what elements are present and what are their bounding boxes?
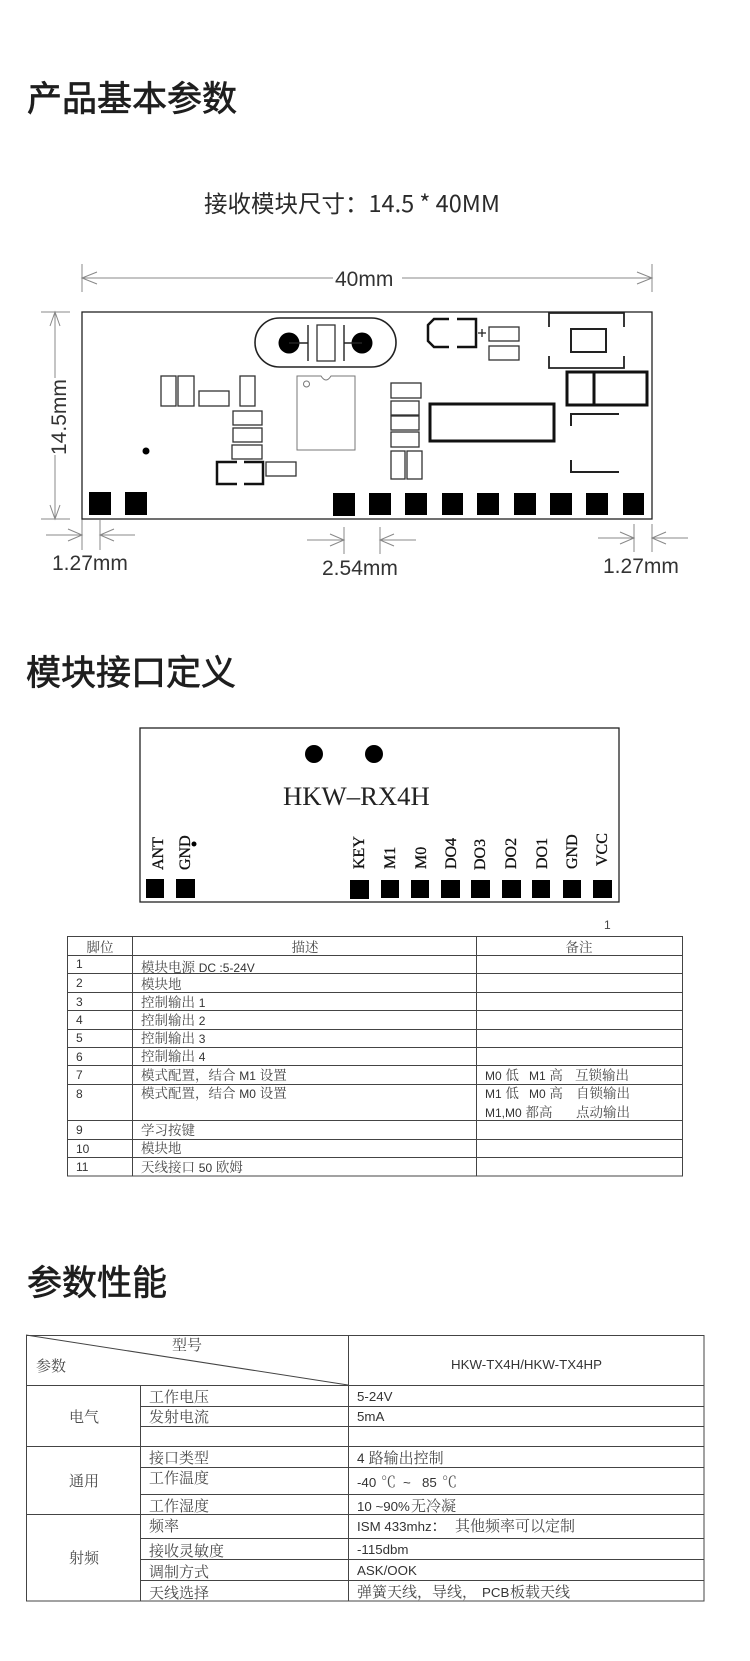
dimension: 40mm width: 40mm — [335, 268, 393, 291]
parameter values: 10 ~90% — [357, 1499, 410, 1514]
pin descriptions: 模式配置，结合 M0 设置 — [141, 1085, 287, 1102]
dimension: 14.5mm height: 14.5mm — [48, 379, 71, 455]
pin numbers: 2 — [76, 976, 83, 990]
parameter values — [357, 1389, 575, 1601]
table: performance parameters — [26, 1335, 704, 1602]
pin numbers: 4 — [76, 1013, 83, 1027]
pin descriptions: 天线接口 50 欧姆 — [141, 1159, 243, 1175]
push button — [549, 313, 624, 368]
pin labels: DO1 — [534, 838, 551, 869]
pin numbers: 6 — [76, 1050, 83, 1064]
dimension: 2.54mm pitch: 2.54mm — [322, 557, 398, 580]
table header labels: HKW-TX4H/HKW-TX4HP — [451, 1357, 602, 1372]
page number: 1 — [604, 918, 611, 932]
small components: left cluster — [142, 376, 296, 476]
pin descriptions: 控制输出 4 — [141, 1048, 206, 1064]
mode notes: 自锁输出 — [576, 1085, 630, 1101]
capacitor bracket: lower left — [217, 462, 263, 484]
parameter names: 工作温度 — [149, 1469, 209, 1487]
parameter names: 工作电压 — [149, 1388, 209, 1406]
parameter values: ASK/OOK — [357, 1563, 417, 1578]
dimension diagram: PCB layout — [41, 264, 688, 580]
corner marks — [571, 414, 619, 472]
table grid — [67, 936, 682, 1176]
pin descriptions: 控制输出 3 — [141, 1030, 206, 1046]
parameter values: ℃ — [381, 1474, 396, 1491]
table header labels: 参数 — [36, 1358, 66, 1375]
parameter values: 4 路输出控制 — [357, 1450, 444, 1467]
dimension: right 1.27mm: 1.27mm — [603, 555, 679, 578]
solder pads — [89, 492, 644, 516]
parameter names — [149, 1388, 224, 1602]
jumper block — [567, 372, 647, 405]
pin labels: ANT — [150, 837, 167, 870]
pin descriptions: 模式配置，结合 M1 设置 — [141, 1067, 287, 1084]
category labels: 电气 — [69, 1408, 99, 1426]
mode notes: M1,M0 都高 — [485, 1104, 552, 1120]
dimension: left 1.27mm: 1.27mm — [52, 552, 128, 575]
parameter values: ℃ — [442, 1474, 457, 1491]
parameter names: 发射电流 — [149, 1408, 209, 1426]
pin descriptions: 模块地 — [141, 1140, 182, 1156]
table grid — [26, 1335, 704, 1601]
pin numbers: 9 — [76, 1123, 83, 1137]
pin descriptions: 模块电源 DC :5-24V — [141, 959, 255, 975]
pin numbers: 5 — [76, 1031, 83, 1045]
parameter names: 工作湿度 — [149, 1497, 209, 1515]
pin labels: VCC — [594, 833, 611, 866]
pin labels: DO2 — [503, 838, 520, 869]
capacitor bracket: top with plus mark — [428, 319, 486, 347]
pin numbers — [76, 957, 90, 1174]
parameter values: ISM 433mhz： — [357, 1519, 445, 1534]
parameter values: 85 — [422, 1475, 437, 1490]
chip footprint — [297, 376, 355, 450]
parameter values: -115dbm — [357, 1542, 408, 1557]
table header: 描述 — [292, 939, 319, 955]
parameter values: 5-24V — [357, 1389, 393, 1404]
large relay block — [430, 404, 554, 441]
pin numbers: 8 — [76, 1087, 83, 1101]
pin labels: KEY — [351, 836, 368, 869]
parameter values: PCB — [482, 1585, 509, 1600]
table: pin definitions — [67, 936, 682, 1176]
pin numbers: 10 — [76, 1142, 90, 1156]
dimension: 14.5mm height — [41, 312, 71, 519]
mode notes — [485, 1067, 630, 1120]
parameter names: 频率 — [149, 1518, 179, 1535]
mode notes: M1 低 — [485, 1086, 519, 1101]
parameter values: 无冷凝 — [411, 1498, 456, 1515]
parameter values: -40 — [357, 1475, 376, 1490]
parameter names: 接收灵敏度 — [149, 1542, 224, 1560]
dimension: 40mm width — [82, 264, 652, 292]
text: receiver module size: 接收模块尺寸：14.5 * 40MM — [204, 185, 500, 219]
table header: 备注 — [566, 940, 593, 955]
heading: module interface definition: 模块接口定义 — [26, 645, 236, 696]
pin descriptions: 控制输出 1 — [141, 994, 206, 1010]
interface diagram: HKW-RX4H — [140, 728, 619, 902]
category labels — [69, 1408, 100, 1567]
pin pads — [146, 879, 612, 899]
pin descriptions: 学习按键 — [141, 1122, 195, 1138]
pin labels — [150, 833, 611, 870]
mode notes: M0 高 — [529, 1085, 563, 1101]
dimension: 2.54mm pitch — [307, 527, 416, 580]
parameter values: 弹簧天线，导线， — [357, 1584, 477, 1601]
pin numbers: 11 — [76, 1160, 89, 1174]
pin descriptions — [141, 959, 287, 1175]
pin numbers: 7 — [76, 1068, 83, 1082]
heading: parameter performance: 参数性能 — [27, 1255, 167, 1306]
pin labels: M1 — [382, 847, 399, 869]
category labels: 射频 — [69, 1550, 100, 1567]
mode notes: 互锁输出 — [575, 1067, 629, 1083]
pin descriptions: 控制输出 2 — [141, 1012, 206, 1028]
PCB board outline — [82, 312, 652, 519]
parameter names: 调制方式 — [149, 1564, 209, 1581]
table header — [86, 939, 593, 955]
parameter values: 5mA — [357, 1409, 384, 1424]
category labels: 通用 — [69, 1473, 99, 1490]
module outline — [140, 728, 619, 902]
small components: right cluster — [391, 327, 519, 479]
pin labels: DO3 — [472, 839, 489, 870]
mode notes: M0 低 — [485, 1068, 519, 1083]
parameter values: 其他频率可以定制 — [455, 1517, 575, 1535]
pin numbers: 3 — [76, 995, 83, 1009]
mode notes: M1 高 — [529, 1067, 563, 1083]
pin labels: GND — [177, 835, 194, 870]
pin labels: M0 — [413, 847, 430, 869]
parameter names: 天线选择 — [149, 1584, 209, 1602]
table header labels: 型号 — [172, 1336, 202, 1354]
parameter names: 接口类型 — [149, 1449, 209, 1467]
pin numbers: 1 — [76, 957, 83, 971]
pin labels: GND — [564, 834, 581, 869]
table header labels — [36, 1336, 602, 1375]
dimension: left 1.27mm — [46, 519, 135, 575]
crystal oscillator — [255, 318, 396, 367]
parameter values: ~ — [403, 1475, 411, 1490]
module name: HKW–RX4H — [283, 781, 430, 811]
heading: product basic parameters: 产品基本参数 — [27, 71, 237, 122]
pin descriptions: 模块地 — [141, 976, 182, 992]
table header: 脚位 — [86, 940, 114, 955]
parameter values: 板载天线 — [510, 1583, 570, 1601]
mode notes: 点动输出 — [576, 1104, 630, 1120]
pin labels: DO4 — [443, 838, 460, 869]
mounting holes — [305, 745, 383, 763]
dimension: right 1.27mm — [598, 524, 688, 578]
